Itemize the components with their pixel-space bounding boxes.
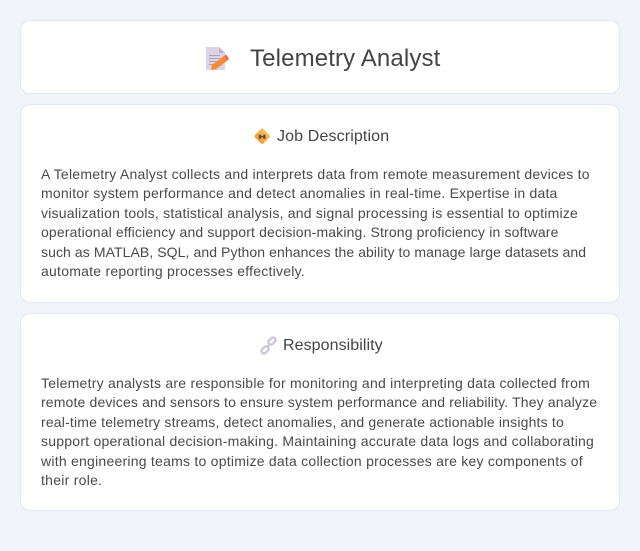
panel: responsibility xyxy=(20,313,620,511)
text block: responsibility: real-time telemetry streams, detect anomalies, and generate actionable insights to xyxy=(41,414,564,430)
text block: responsibility: support operational decision-making. Maintaining accurate data logs and collaborating xyxy=(41,433,594,449)
text block: job description: monitor system performance and detect anomalies in real-time. Expertise in data xyxy=(41,185,558,201)
text block: job description xyxy=(41,166,590,279)
icon: document with pencil xyxy=(206,47,229,70)
icon: orange diamond sign xyxy=(254,128,270,144)
panel: title card xyxy=(20,20,620,94)
text block: responsibility: with engineering teams to optimize data collection processes are key components of xyxy=(41,453,583,469)
panel: job description xyxy=(20,104,620,303)
text block: job description: visualization tools, statistical analysis, and signal processing is essential to optimize xyxy=(41,205,578,221)
icon: chain link xyxy=(260,336,277,355)
heading: job description: Job Description xyxy=(277,128,389,145)
title: Telemetry Analyst xyxy=(250,45,440,72)
text block: job description: automate reporting processes effectively. xyxy=(41,263,305,279)
text block: job description: such as MATLAB, SQL, and Python enhances the ability to manage large datasets and xyxy=(41,244,586,260)
text block: responsibility: Telemetry analysts are responsible for monitoring and interpreting data collected from xyxy=(41,375,590,391)
text block: job description: operational efficiency and support decision-making. Strong proficiency in software xyxy=(41,224,559,240)
text block: responsibility: their role. xyxy=(41,472,102,488)
heading: responsibility: Responsibility xyxy=(283,337,383,354)
text block: job description: A Telemetry Analyst collects and interprets data from remote measurement devices to xyxy=(41,166,590,182)
text block: responsibility: remote devices and sensors to ensure system performance and reliability. They analyze xyxy=(41,394,597,410)
